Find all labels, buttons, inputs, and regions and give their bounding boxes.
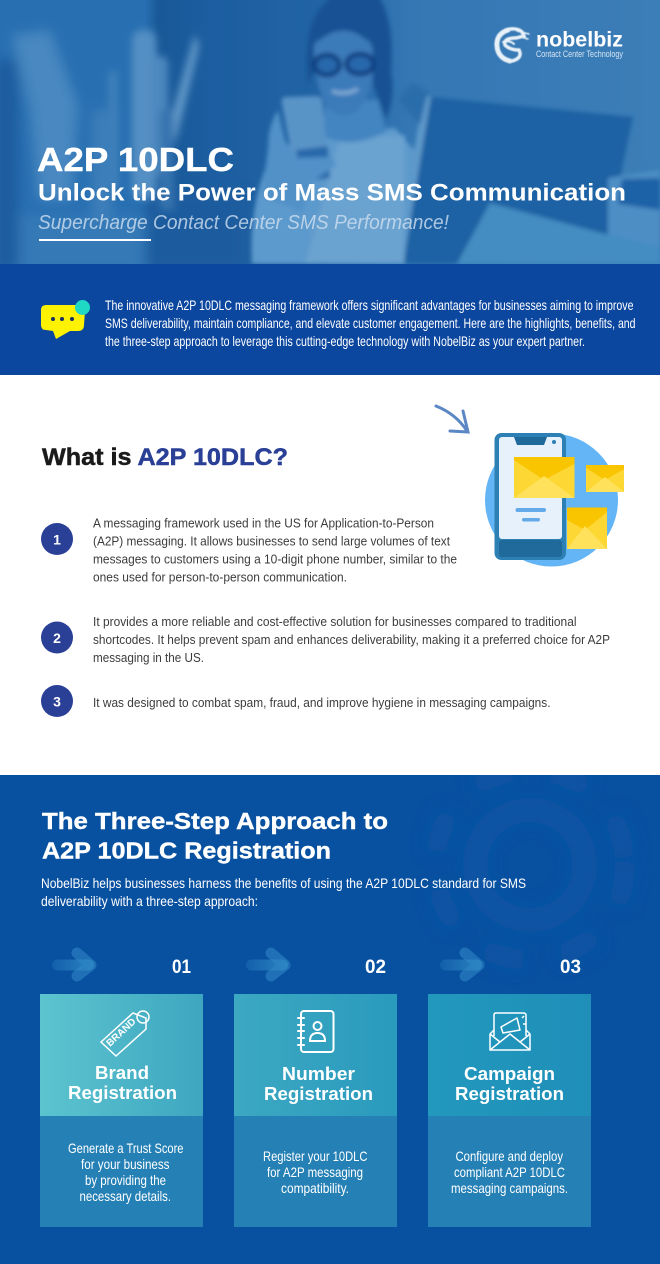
item 2 text: shortcodes. It helps prevent spam and enhances deliverability, making it a preferred choice for A2P xyxy=(93,632,610,647)
panel: what is A2P 10DLC xyxy=(0,375,660,775)
hand xyxy=(262,110,336,212)
card title xyxy=(455,1064,564,1104)
card text xyxy=(451,1148,568,1196)
item 2 text: It provides a more reliable and cost-effective solution for businesses compared to traditional xyxy=(93,614,577,629)
icon: brand tag: BRAND xyxy=(105,1017,138,1049)
card text xyxy=(263,1148,368,1196)
card: number registration xyxy=(234,994,397,1227)
item 1 text: messages to customers using a 10-digit phone number, similar to the xyxy=(93,552,457,566)
section heading: What is A2P 10DLC? xyxy=(42,444,288,471)
card title: Brand xyxy=(95,1063,149,1083)
icon: chat bubble xyxy=(41,300,90,339)
section description: deliverability with a three-step approach: xyxy=(41,893,258,909)
step number 02: 02 xyxy=(365,957,386,978)
card title: Campaign xyxy=(464,1064,555,1084)
icon: address book xyxy=(298,1011,334,1052)
item 2 text xyxy=(93,614,610,665)
icon: envelope with megaphone xyxy=(490,1013,530,1050)
step number 03: 03 xyxy=(560,957,581,978)
section heading: The Three-Step Approach to xyxy=(42,808,388,834)
envelope small xyxy=(586,465,624,492)
card title xyxy=(68,1063,177,1103)
tagline underline xyxy=(39,239,151,241)
card text: by providing the xyxy=(85,1172,166,1188)
card text: Configure and deploy xyxy=(456,1148,563,1164)
face xyxy=(314,31,373,116)
card text xyxy=(68,1140,184,1204)
card text: for your business xyxy=(81,1156,170,1172)
logo xyxy=(497,28,623,61)
item 1 text: (A2P) messaging. It allows businesses to send large volumes of text xyxy=(93,534,450,548)
number badge 1 xyxy=(41,523,73,555)
number badge 3 xyxy=(41,685,73,717)
card text: necessary details. xyxy=(80,1188,171,1204)
item 2 xyxy=(41,614,610,665)
mouth xyxy=(332,89,358,93)
envelope large xyxy=(514,457,574,498)
panel: hero banner xyxy=(0,0,660,275)
arrow: step 1 xyxy=(52,953,94,976)
item 3 text: It was designed to combat spam, fraud, and improve hygiene in messaging campaigns. xyxy=(93,695,550,710)
neck xyxy=(322,100,386,142)
icon: brand tag xyxy=(101,1011,149,1056)
section heading xyxy=(42,808,388,864)
panel: three-step approach xyxy=(0,770,660,1264)
section description: NobelBiz helps businesses harness the benefits of using the A2P 10DLC standard for SMS xyxy=(41,875,526,891)
envelope lower xyxy=(567,508,607,549)
arrow: step 2 xyxy=(246,953,288,976)
card title xyxy=(264,1064,373,1104)
shirt xyxy=(251,128,414,264)
number badge 2: 2 xyxy=(53,630,61,646)
section description xyxy=(41,875,526,909)
logo strapline: Contact Center Technology xyxy=(536,49,623,60)
card text: Register your 10DLC xyxy=(263,1148,368,1164)
step number 01: 01 xyxy=(172,957,191,978)
item 2 text: messaging in the US. xyxy=(93,650,204,665)
number badge 2 xyxy=(41,622,73,654)
phone xyxy=(280,94,326,146)
item 1 xyxy=(41,516,457,584)
card title: Registration xyxy=(264,1084,373,1104)
glasses xyxy=(314,54,374,75)
hair xyxy=(307,0,393,120)
item 1 text: ones used for person-to-person communication. xyxy=(93,570,347,584)
card: brand registration xyxy=(40,994,203,1227)
card title: Registration xyxy=(455,1084,564,1104)
icon: phone with envelopes xyxy=(485,433,624,566)
laptop xyxy=(397,97,633,264)
hero subtitle: Unlock the Power of Mass SMS Communication xyxy=(38,180,626,206)
card: campaign registration xyxy=(428,994,591,1227)
hero title: A2P 10DLC xyxy=(37,141,234,178)
item 1 text: A messaging framework used in the US for Application-to-Person xyxy=(93,516,434,530)
card title: Number xyxy=(282,1064,355,1084)
intro paragraph xyxy=(105,297,636,349)
logo wordmark: nobelbiz xyxy=(536,28,623,52)
hero photo xyxy=(0,0,660,275)
logo dragon mark xyxy=(497,29,529,61)
section heading: A2P 10DLC Registration xyxy=(42,838,331,864)
item 1 text xyxy=(93,516,457,584)
number badge 3: 3 xyxy=(53,694,61,710)
arrow: step 3 xyxy=(440,953,482,976)
card text: compatibility. xyxy=(281,1180,349,1196)
arrow: hand drawn xyxy=(436,406,468,432)
number badge 1: 1 xyxy=(53,532,61,548)
hero tagline: Supercharge Contact Center SMS Performance! xyxy=(38,212,449,234)
item 3 xyxy=(41,685,550,717)
card title: Registration xyxy=(68,1083,177,1103)
card text: Generate a Trust Score xyxy=(68,1140,184,1156)
card text: messaging campaigns. xyxy=(451,1180,568,1196)
panel: intro band xyxy=(0,264,660,375)
card text: for A2P messaging xyxy=(267,1164,363,1180)
card text: compliant A2P 10DLC xyxy=(454,1164,565,1180)
